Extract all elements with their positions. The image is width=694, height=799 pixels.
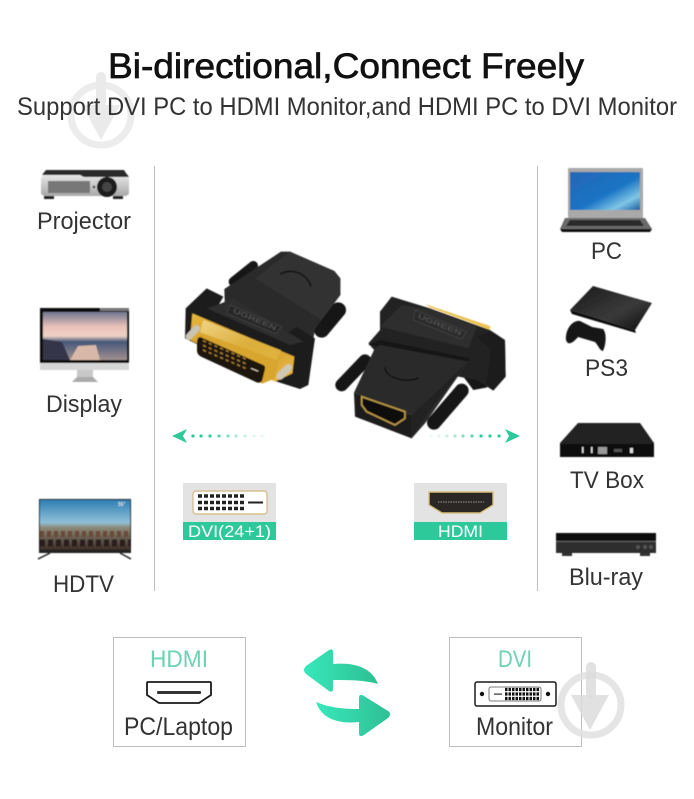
adapter: DVI side facing front: UGREEN (232, 308, 278, 333)
watermark: bottom right (561, 662, 621, 735)
arrow: dotted left toward DVI (172, 429, 264, 443)
label: TV Box: TV Box (570, 467, 644, 494)
panel: DVI Monitor (450, 638, 582, 746)
arrow: dotted right toward HDMI (429, 429, 520, 443)
panel: HDMI PC/Laptop: PC/Laptop (124, 713, 233, 741)
icon: HDMI port (429, 492, 493, 513)
icon: HDTV (38, 499, 131, 559)
adapter: HDMI side facing front: UGREEN (417, 313, 463, 337)
icon: DVI outline (475, 682, 556, 706)
icon: display (40, 308, 129, 382)
label: Blu-ray: Blu-ray (569, 564, 643, 591)
icon: two-way swap arrows (304, 649, 390, 736)
panel: DVI Monitor: Monitor (476, 713, 553, 741)
icon: Blu-ray player (556, 533, 656, 556)
icon: projector (41, 170, 129, 199)
icon: TV box (560, 423, 654, 457)
panel: HDMI PC/Laptop: HDMI (150, 646, 208, 673)
label: HDTV: HDTV (53, 571, 114, 598)
icon: laptop PC (560, 168, 652, 232)
HDMI port tile (414, 483, 507, 541)
subtitle: Support DVI PC to HDMI Monitor,and HDMI PC to DVI Monitor (17, 93, 677, 121)
icon: HDMI outline (147, 682, 211, 703)
label: Projector: Projector (37, 208, 131, 235)
icon: HDTV: 55" (118, 502, 126, 508)
adapter: HDMI side facing front (342, 297, 506, 438)
watermark: top left (71, 72, 131, 145)
icon: DVI port (193, 491, 267, 514)
divider left (154, 166, 155, 591)
divider right (537, 166, 538, 591)
HDMI port tile: HDMI (438, 522, 483, 541)
label: PC: PC (591, 238, 622, 265)
label: PS3: PS3 (585, 355, 628, 382)
DVI port tile (183, 483, 276, 541)
label: Display: Display (46, 391, 122, 418)
icon: PS3 console (566, 286, 652, 351)
adapter: DVI side facing front (185, 252, 340, 389)
DVI port tile: DVI(24+1) (188, 522, 271, 541)
panel: DVI Monitor: DVI (498, 646, 532, 673)
title: Bi-directional,Connect Freely (108, 47, 585, 86)
panel: HDMI PC/Laptop (114, 638, 246, 746)
